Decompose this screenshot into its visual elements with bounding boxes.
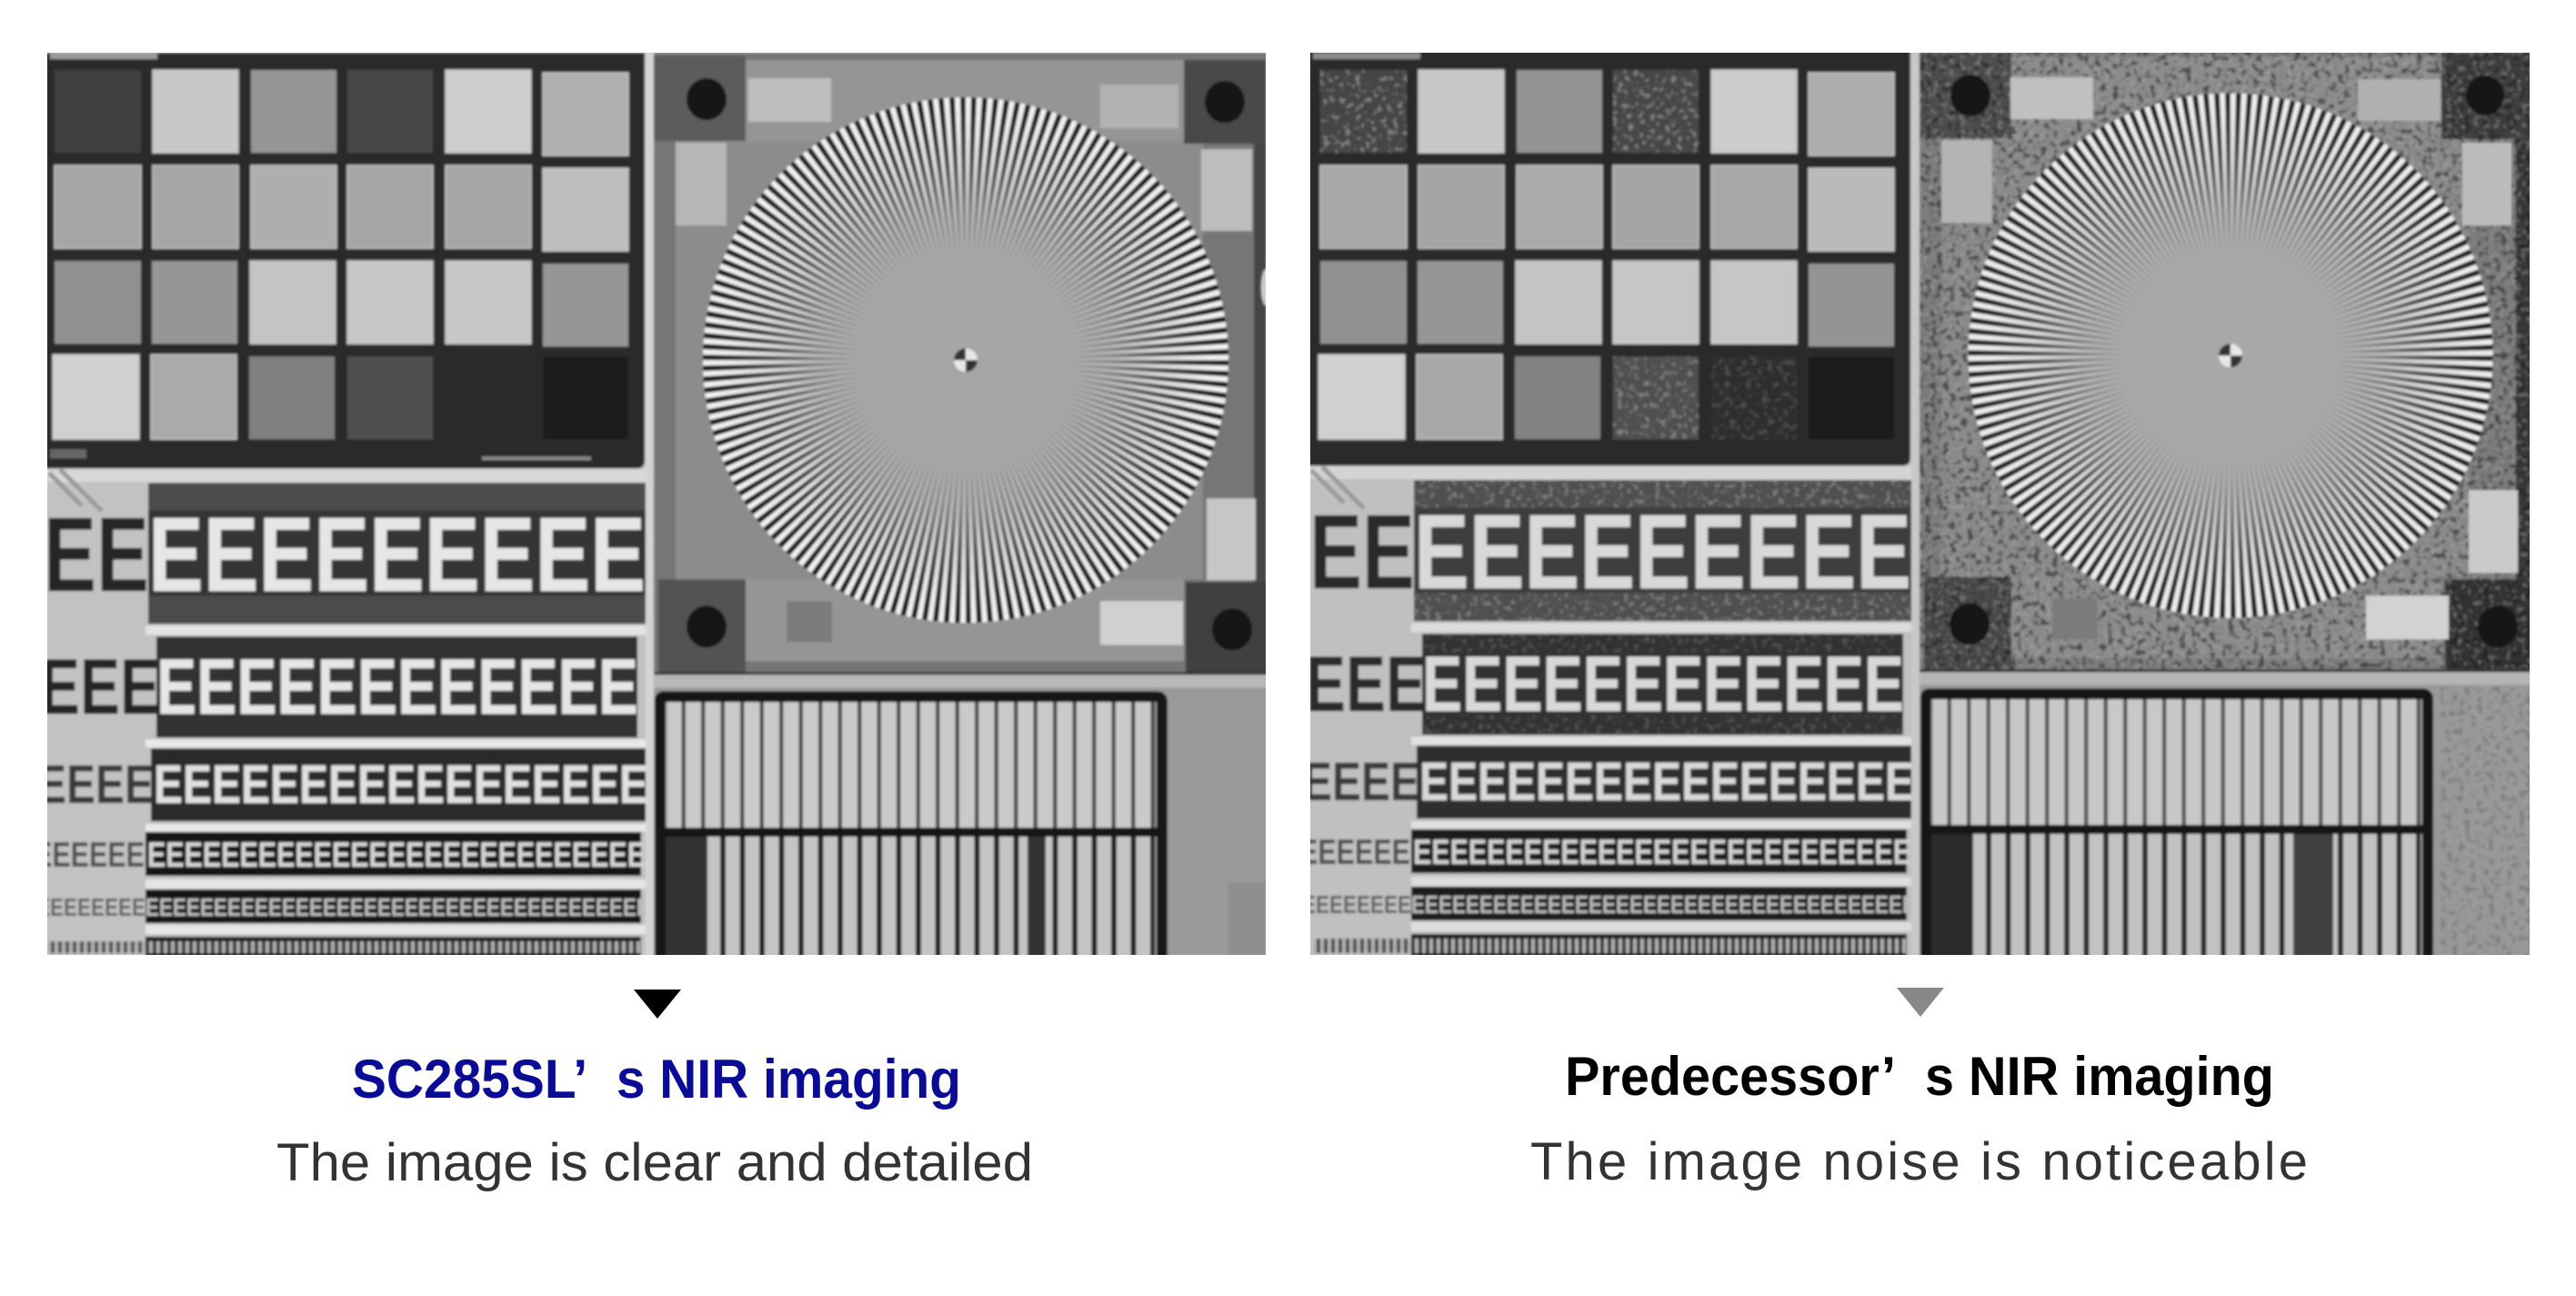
chart: E resolution rows: EEEEEEEEE — [1414, 492, 1911, 611]
chart: grey patch card — [1295, 50, 1910, 466]
chart: E resolution rows: EEEEEEEEE — [148, 495, 646, 614]
chart: E resolution rows: EEE — [1310, 640, 1426, 728]
light separators — [38, 469, 646, 482]
noise: target background — [1919, 50, 2538, 671]
arrow: black marker under left image — [634, 990, 681, 1019]
heading: Predecessor NIR imaging: Predecessor’ s NIR imaging — [1565, 1046, 2274, 1107]
chart: E resolution rows: EEEEEEEEEEEEEEEEEEEEEEEEEEE — [147, 836, 646, 875]
chart: E resolution rows — [1299, 480, 1916, 957]
chart: bar strip target — [654, 675, 1272, 959]
chart: E resolution rows: EE — [47, 495, 149, 614]
arrow: grey marker under right image — [1897, 988, 1944, 1017]
noise: dark patches and E row margins — [1320, 70, 1911, 734]
chart: bar strip target — [1919, 672, 2538, 959]
chart: E resolution rows: EEEEEEEEEEEE — [1422, 640, 1904, 728]
chart: E resolution rows: EEEEEEEEEEEEEEEEEEEEEEEEEEEEEEEEEEEEE — [1411, 890, 1916, 919]
text: left description: The image is clear and detailed — [276, 1133, 1033, 1192]
chart: E resolution rows: EEEEEEEEEEEEEEEEE — [1419, 751, 1914, 812]
vertical light divider — [1911, 50, 1920, 955]
light separators — [1295, 467, 1911, 479]
chart: E resolution rows: EE — [1310, 492, 1415, 611]
vertical light divider — [646, 53, 655, 955]
chart: E resolution rows: EEEEEEEEEEEEEEEEE — [154, 754, 648, 815]
text: right description: The image noise is noticeable — [1530, 1132, 2308, 1191]
panel: SC285SL NIR image — [47, 53, 1266, 955]
chart: E resolution rows: EEEEEEEEEEEEEEEEEEEEEEEEEEEEEEEEEEEEE — [145, 893, 650, 921]
panel: predecessor NIR image — [1310, 53, 2530, 955]
chart: E resolution rows — [34, 483, 650, 957]
chart: E resolution rows: EEEEEEEEEEEE — [156, 643, 638, 731]
chart: Siemens star target — [1919, 50, 2538, 672]
chart: Siemens star target — [654, 53, 1272, 675]
chart: E resolution rows: EEEEEEEEEEEEEEEEEEEEEEEEEEE — [1413, 833, 1911, 872]
chart: grey patch card — [38, 53, 645, 468]
